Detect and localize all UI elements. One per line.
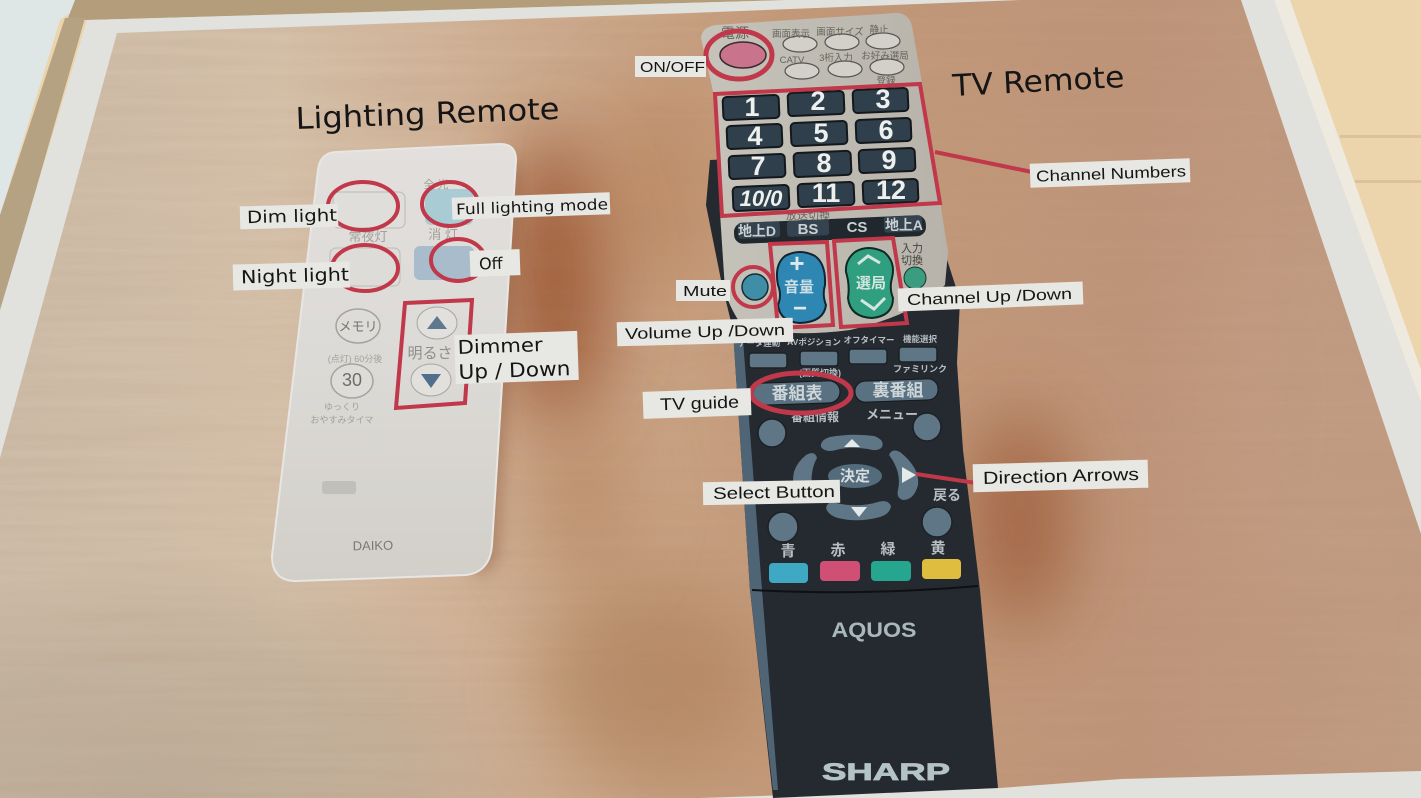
captions above round keys: 戻る: [933, 487, 961, 503]
number keys: 2: [810, 86, 826, 116]
captions above round keys: [791, 407, 961, 503]
broadcast selector bar: CS: [847, 219, 867, 236]
button: back program guide: 裏番組: [872, 380, 924, 400]
ring: night light: [332, 245, 398, 291]
small function buttons and captions: 静止: [869, 24, 889, 36]
button: dimmer down: [411, 364, 451, 396]
ring: power: [706, 31, 772, 79]
tv remote body: [706, 150, 998, 798]
number keys: 8: [816, 148, 832, 178]
volume rocker: [777, 248, 826, 323]
label: Select Button: [703, 480, 840, 505]
heading: TV Remote: TV Remote: [951, 60, 1125, 104]
box: channel: [834, 238, 907, 327]
label: Off: Off: [479, 254, 504, 274]
tv remote: [701, 13, 998, 798]
button: dim light: [333, 192, 405, 228]
broadcast selector bar: 地上A: [885, 217, 923, 233]
Japanese button captions: 常夜灯: [348, 229, 388, 244]
number keys: 4: [747, 121, 763, 151]
button: input switch: 入力: [901, 242, 923, 255]
button: input switch: [901, 242, 926, 289]
button: mute: [742, 274, 768, 300]
Japanese button captions: おやすみタイマ: [310, 415, 374, 425]
small function buttons and captions: 画面表示: [772, 29, 810, 40]
button: TV guide: 番組表: [772, 384, 822, 403]
Japanese button captions: ゆっくり: [324, 402, 360, 412]
button: memory: [336, 309, 380, 343]
label: Direction Arrows: Direction Arrows: [983, 464, 1140, 488]
small function buttons and captions: 電源: [721, 25, 749, 41]
label: Dimmer Up / Down: [454, 331, 579, 384]
broadcast selector bar: 地上D: [738, 223, 776, 239]
button: night light: [330, 248, 400, 286]
Japanese button captions: [310, 177, 458, 425]
small function buttons and captions: CATV: [780, 55, 805, 66]
function keys row: データ連動: [738, 338, 781, 348]
function keys row: オフタイマー: [843, 335, 895, 345]
colour keys: 黄: [930, 539, 946, 557]
label: Dimmer Up / Down: Up / Down: [458, 356, 571, 384]
colour keys: 赤: [830, 542, 846, 559]
number keys: 6: [878, 115, 894, 145]
Japanese button captions: 全 光: [423, 177, 449, 191]
label: Channel Up /Down: Channel Up /Down: [907, 286, 1072, 309]
button: input switch: 切換: [901, 254, 923, 267]
function keys row: AVポジション: [787, 337, 841, 347]
label: ON/OFF: [635, 56, 706, 77]
captions above round keys: 番組情報: [791, 409, 839, 424]
remote shadow: [470, 160, 520, 578]
brand: AQUOS: AQUOS: [832, 619, 916, 642]
button: 30 minute timer: [331, 364, 373, 398]
ring: mute: [733, 267, 773, 307]
colour keys: 青: [780, 543, 796, 560]
button: memory: メモリ: [338, 319, 378, 334]
function keys row: (画質切換): [799, 367, 841, 378]
number keys: [723, 84, 918, 211]
number keys: 3: [875, 84, 891, 114]
label: Channel Numbers: [1030, 158, 1190, 188]
body left rim highlight: [733, 332, 778, 790]
small function buttons and captions: 画面サイズ: [816, 26, 864, 38]
Japanese button captions: (点灯) 60分後: [328, 353, 382, 364]
label: Full lighting mode: Full lighting mode: [456, 195, 608, 219]
up key: [821, 435, 883, 451]
small function buttons and captions: 3桁入力: [819, 52, 853, 64]
number keys: 9: [881, 145, 897, 175]
lighting remote body: [272, 144, 516, 581]
ring: full lighting: [422, 182, 478, 226]
direction pad: 決定: [840, 467, 870, 485]
broadcast selector bar: [734, 208, 926, 244]
broadcast selector bar: BS: [798, 221, 818, 238]
lighting remote: [272, 144, 520, 581]
round keys: [758, 413, 952, 542]
label: ON/OFF: ON/OFF: [640, 59, 705, 76]
small function buttons and captions: お好み選局: [861, 50, 909, 62]
line to direction arrows: [916, 474, 976, 483]
power button: [720, 42, 766, 68]
ring: dim light: [328, 182, 398, 230]
label: Dim light: Dim light: [247, 206, 338, 228]
slide switch: [322, 481, 356, 494]
channel rocker: [846, 248, 893, 318]
captions above round keys: メニュー: [866, 407, 918, 422]
volume rocker: +: [789, 248, 805, 278]
function keys row: ファミリンク: [893, 364, 947, 374]
brand: SHARP: SHARP: [822, 759, 950, 786]
right key: [889, 451, 918, 500]
label: Dimmer Up / Down: Dimmer: [457, 334, 543, 359]
box: volume: [770, 242, 833, 328]
number keys: 5: [813, 118, 829, 148]
colour keys: 緑: [880, 540, 896, 558]
button: off: [414, 246, 474, 280]
label: Volume Up /Down: [617, 318, 793, 346]
volume rocker: −: [793, 295, 807, 322]
label: Off: [470, 249, 520, 277]
red callouts: [328, 31, 1032, 483]
number keys: 1: [744, 92, 760, 122]
number keys: 7: [750, 151, 766, 181]
button: full lighting: [425, 189, 473, 225]
channel rocker: 選局: [856, 275, 886, 292]
ring: off: [431, 239, 485, 281]
label: Night light: [233, 261, 350, 291]
label: Direction Arrows: [973, 460, 1148, 492]
label: TV guide: TV guide: [660, 393, 739, 414]
colour keys: [769, 539, 961, 583]
label: Channel Up /Down: [898, 281, 1083, 312]
box: dimmer: [396, 300, 472, 408]
label: Select Button: Select Button: [713, 483, 835, 503]
label: Full lighting mode: [452, 192, 610, 220]
label: Channel Numbers: Channel Numbers: [1036, 163, 1187, 186]
label: Mute: [676, 280, 730, 301]
small function buttons and captions: [721, 24, 909, 87]
label: Mute: Mute: [683, 283, 727, 300]
button: dimmer up: [417, 307, 457, 339]
function keys row: [738, 334, 947, 378]
Japanese button captions: 消 灯: [428, 227, 458, 242]
remote seam: [752, 586, 978, 592]
button: back program guide: [855, 379, 938, 402]
ring: TV guide: [751, 373, 851, 413]
tv remote top panel: [701, 13, 948, 333]
broadcast selector bar: 放送切換: [786, 208, 830, 222]
brand: DAIKO: DAIKO: [353, 538, 393, 553]
small function buttons and captions: 登録: [876, 75, 896, 87]
number keys: 11: [812, 178, 840, 208]
number keys: 12: [876, 175, 906, 205]
direction pad: [793, 435, 918, 520]
volume rocker: 音量: [784, 279, 814, 296]
Japanese button captions: 明るさ: [407, 345, 453, 362]
button: 30 minute timer: 30: [342, 370, 362, 390]
label: TV guide: [643, 388, 751, 419]
label: Dim light: [240, 204, 338, 229]
function keys row: 機能選択: [903, 334, 937, 344]
left key: [793, 453, 817, 490]
line to channel numbers: [935, 152, 1032, 172]
select key: [828, 464, 882, 488]
label: Volume Up /Down: Volume Up /Down: [625, 322, 785, 343]
button: TV guide: [753, 380, 840, 405]
heading: Lighting Remote: Lighting Remote: [295, 92, 560, 137]
label: Night light: Night light: [241, 265, 349, 288]
number keys: 10/0: [740, 186, 783, 211]
down key: [826, 501, 891, 520]
box: channel numbers: [715, 84, 940, 216]
